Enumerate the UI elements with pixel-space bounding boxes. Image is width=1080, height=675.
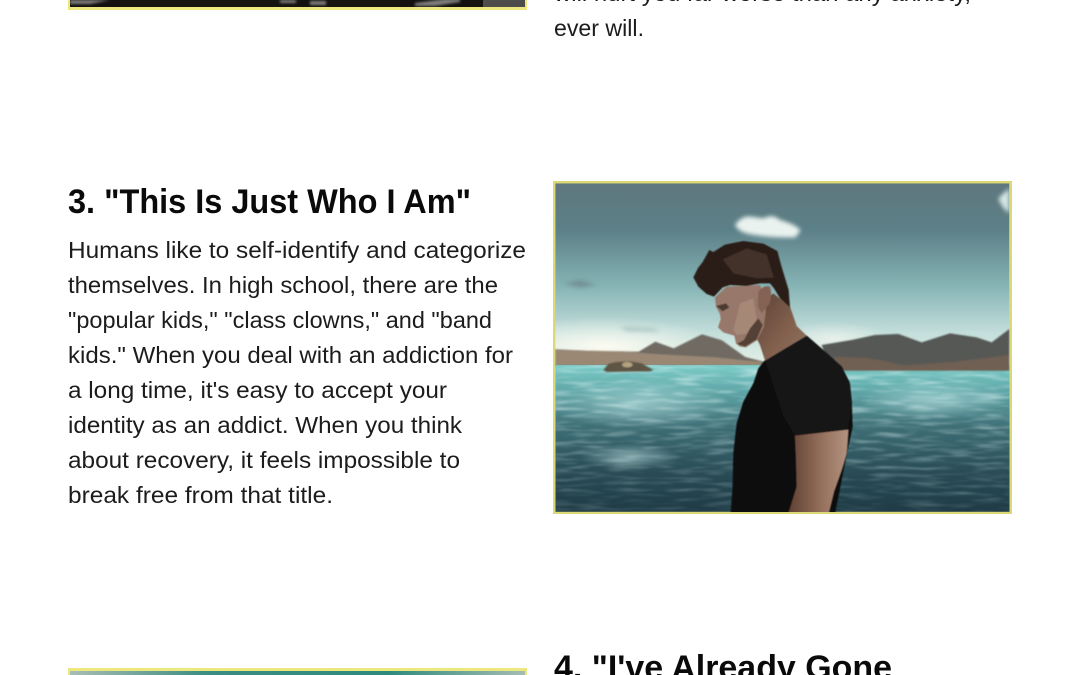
image: man in black t-shirt beside a lake	[553, 181, 1012, 514]
heading: section 3: 3. "This Is Just Who I Am"	[68, 183, 471, 221]
text block: section 3 body: identity as an addict. When you think	[68, 412, 463, 438]
t-shirt body	[731, 336, 853, 513]
text block: section 3 body: "popular kids," "class clowns," and "band	[68, 307, 492, 333]
text block: section 3 body: kids." When you deal with an addiction for	[68, 342, 513, 368]
text block: section 3 body: Humans like to self-identify and categorize	[68, 237, 526, 263]
image: previous section photo, bottom edge	[68, 0, 527, 10]
t-shirt shoulder	[765, 336, 852, 436]
text block: section 3 body	[68, 237, 526, 508]
text block: section 3 body: a long time, it's easy to accept your	[68, 377, 447, 403]
face	[715, 285, 767, 347]
image: next section photo, top edge	[68, 668, 527, 675]
text: end of previous section: ever will.	[554, 15, 644, 41]
hair	[693, 241, 790, 307]
neck	[757, 293, 807, 361]
text: end of previous section	[553, 0, 971, 41]
text block: section 3 body: about recovery, it feels impossible to	[68, 447, 460, 473]
text block: section 3 body: themselves. In high school, there are the	[68, 272, 498, 298]
ear	[758, 286, 771, 313]
arm	[788, 430, 848, 513]
text block: section 3 body: break free from that title.	[68, 482, 333, 508]
